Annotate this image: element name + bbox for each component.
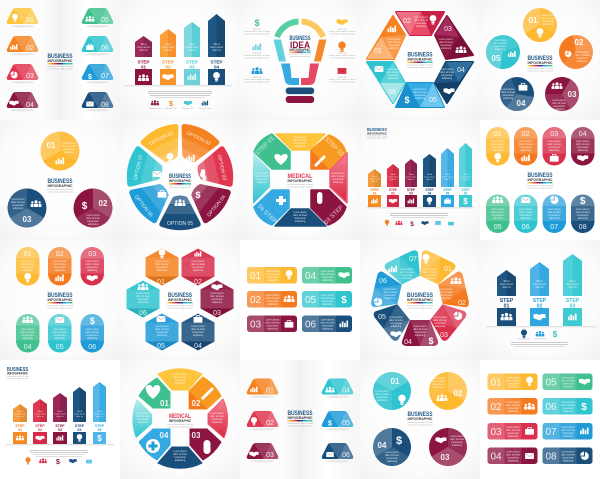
panel: five pies [479, 8, 598, 118]
numbers: 01 [444, 266, 452, 273]
title [6, 367, 29, 380]
option labels: OPTION 03 [216, 154, 227, 181]
title: BUSINESS [48, 179, 72, 185]
panel: eight trapezoids: 02 [26, 45, 34, 52]
panel: three pies [0, 132, 120, 235]
panel: eight horizontal bars: 03 [490, 427, 502, 438]
panel: six step arrows: STEP [389, 188, 398, 192]
text blocks [386, 16, 454, 100]
title: INFOGRAPHIC [408, 58, 433, 62]
panel: six step arrows: 01 [373, 192, 376, 196]
panel: eight trapezoids: 01 [26, 17, 34, 24]
panel: four pies [366, 365, 474, 473]
title: INFOGRAPHIC [528, 61, 553, 65]
panel: six step arrows: 03 [409, 192, 413, 196]
panel: six horizontal bars: 05 [305, 295, 316, 306]
panel: six pills: 02 [56, 251, 64, 258]
panel: four step arrows: STEP [138, 60, 150, 64]
numbers: 06 [379, 278, 387, 285]
panel: six pills: 04 [24, 344, 32, 351]
panel: three step arrows: 01 [504, 304, 509, 310]
panel: four step arrows: 01 [141, 64, 146, 70]
panel: eight horizontal bars: 08 [545, 452, 557, 462]
panel: six hexagons: 06 [139, 310, 147, 317]
option labels: OPTION 04 [206, 194, 227, 218]
option labels: OPTION 05 [167, 221, 193, 227]
step labels [255, 135, 345, 226]
title: BUSINESS [367, 127, 388, 133]
panel: eight trapezoids: $ [88, 74, 92, 81]
panel: six pills [16, 247, 104, 352]
panel: five pies: 01 [529, 16, 538, 25]
panel: five pies: 04 [517, 99, 526, 108]
title: INFOGRAPHIC [48, 184, 73, 188]
title [47, 54, 74, 70]
title: BUSINESS [528, 173, 552, 179]
panel: four step arrows: STEP [162, 60, 174, 64]
right steps: STEP 04 [338, 29, 347, 31]
pill icon [204, 440, 210, 454]
step labels: 04 STEP [256, 204, 277, 225]
numbers: 02 [403, 18, 411, 25]
title [287, 174, 314, 188]
panel: eight horizontal bars: 05 [545, 378, 557, 388]
panel: five step arrows: $ [97, 434, 102, 443]
panel: three step arrows [486, 254, 596, 347]
panel: four step arrows: STEP [210, 60, 222, 64]
panel: five step arrows [6, 367, 114, 466]
numbers: 06 [388, 89, 396, 96]
title [169, 174, 192, 189]
title: INFOGRAPHIC [7, 372, 29, 376]
panel: six pills: $ [90, 316, 95, 326]
text blocks [136, 373, 224, 462]
pen icon [201, 387, 214, 400]
legend icons: $ [169, 101, 173, 108]
panel: six trapezoids: 01 [266, 388, 274, 394]
panel: eight trapezoids: 03 [26, 73, 34, 80]
title [167, 414, 194, 428]
right steps: STEP 06 [338, 77, 347, 79]
option labels: OPTION 06 [133, 194, 154, 219]
text blocks [383, 268, 453, 337]
panel: six step arrows: 05 [446, 192, 449, 196]
numbers: 04 [404, 339, 412, 346]
panel: four step arrows: STEP [186, 60, 198, 64]
right steps: STEP 05 [338, 53, 347, 55]
option labels: OPTION 07 [133, 154, 144, 181]
panel: eight trapezoids: 04 [26, 102, 34, 109]
left steps [244, 18, 271, 84]
panel: six pills: 01 [24, 251, 32, 258]
left steps: $ [254, 18, 260, 28]
panel: six pills: 05 [56, 344, 64, 351]
panel: six hexagons: 02 [194, 279, 202, 286]
panel: four pies: 04 [378, 441, 387, 450]
title: INFOGRAPHIC [367, 131, 388, 135]
panel: three step arrows: STEP [533, 298, 547, 304]
numbers: 01 [374, 48, 382, 55]
panel: six horizontal bars: 02 [250, 295, 261, 306]
pen icon [314, 155, 326, 167]
title: BUSINESS [408, 52, 432, 58]
title: INFOGRAPHIC [169, 179, 191, 183]
panel: business idea bulb [244, 18, 356, 103]
legend text [390, 213, 448, 218]
panel: eight horizontal bars: 01 [490, 378, 502, 388]
title: BUSINESS [169, 174, 191, 180]
arrow body text [14, 410, 105, 418]
step labels: 03 STEP [324, 205, 345, 226]
legend icons: Sample Text [165, 107, 177, 110]
title: BUSINESS [408, 412, 432, 418]
panel: eight horizontal bars [488, 374, 592, 464]
title [289, 36, 312, 58]
panel: four pies: $ [396, 435, 402, 447]
legend icons: Sample Text [199, 107, 211, 110]
step labels: STEP 02 [323, 137, 345, 158]
left steps: STEP 02 [253, 53, 262, 55]
panel: eight trapezoids: 05 [101, 17, 109, 24]
panel: three pies: $ [82, 201, 88, 212]
title: BUSINESS [48, 54, 72, 60]
panel: four step arrows: 03 [189, 64, 195, 70]
plus icon [146, 439, 160, 453]
panel: six step arrows: $ [463, 197, 468, 206]
panel: five step arrows: 03 [58, 428, 62, 432]
title [47, 179, 74, 194]
panel: six horizontal bars: 06 [305, 320, 316, 330]
panel: three pies: 01 [47, 141, 56, 150]
panel: four step arrows: 02 [165, 64, 171, 70]
panel: six step arrows: 04 [428, 192, 431, 196]
panel: four pies: 02 [454, 389, 463, 398]
legend icons: Sample Text [182, 107, 194, 110]
panel: eight pills: 08 [579, 224, 587, 231]
panel: five step arrows: STEP [75, 424, 85, 428]
panel: five step arrows: STEP [35, 424, 45, 428]
title: INFOGRAPHIC [169, 419, 191, 423]
icons: $ [428, 336, 434, 346]
panel: six horizontal bars: $ [341, 295, 347, 306]
title [167, 293, 194, 310]
title [407, 293, 434, 310]
panel: five step arrows: 01 [18, 428, 22, 432]
panel: six hexagons: 01 [157, 279, 165, 286]
panel: three step arrows: 03 [570, 304, 575, 310]
panel: six step arrows [366, 127, 474, 228]
title: MEDICAL [288, 174, 313, 180]
heart icon [274, 154, 288, 165]
title: INFOGRAPHIC [408, 417, 433, 421]
panel: six horizontal bars [247, 267, 352, 332]
panel: six trapezoids: $ [328, 420, 332, 428]
legend icons: Sample Text [534, 338, 546, 340]
title [407, 52, 434, 69]
numbers: 03 [440, 332, 448, 339]
panel: five step arrows: 05 [98, 428, 101, 432]
panel: eight horizontal bars: $ [581, 402, 587, 413]
panel: six step arrows: 06 [464, 192, 467, 196]
panel: eight pills: 02 [522, 131, 530, 138]
left steps: STEP 01 [253, 29, 262, 31]
option labels [133, 130, 227, 227]
panel: six trapezoids: 02 [266, 420, 274, 427]
panel: eight pills: 06 [522, 224, 530, 231]
title: BUSINESS [528, 56, 552, 62]
numbers: 05 [429, 97, 437, 104]
legend icons: $ [410, 222, 414, 228]
panel: six trapezoids: 03 [266, 452, 274, 459]
panel: eight pills: 04 [579, 131, 587, 138]
panel: three step arrows: STEP [500, 298, 514, 304]
title [287, 411, 314, 428]
title [47, 293, 74, 310]
panel: five pies: 02 [575, 38, 584, 47]
panel: six trapezoids: 04 [342, 388, 350, 394]
panel: six horizontal bars: 03 [250, 320, 261, 330]
panel: six step arrows: STEP [370, 188, 380, 192]
panel: eight pills [486, 127, 594, 233]
panel: six hexagons: 04 [194, 343, 202, 350]
pill icon [317, 192, 322, 204]
title: INFOGRAPHIC [407, 298, 433, 302]
panel: five step arrows: 04 [78, 428, 81, 432]
legend icons [518, 330, 558, 340]
panel: six horizontal bars: 01 [250, 271, 261, 282]
icons: $ [404, 95, 410, 105]
panel: eight horizontal bars: 07 [545, 427, 557, 438]
option labels: OPTION 01 [148, 130, 175, 147]
numbers: 04 [160, 431, 169, 440]
option labels: OPTION 02 [185, 130, 212, 147]
panel: five pies: 05 [492, 54, 501, 63]
panel: eight horizontal bars: 04 [490, 452, 502, 462]
legend icons: Sample Text [518, 338, 530, 340]
title: INFOGRAPHIC [528, 178, 553, 182]
title: INFOGRAPHIC [288, 416, 313, 420]
numbers [160, 399, 201, 440]
panel: six trapezoids: 05 [342, 420, 350, 427]
left steps: STEP 03 [253, 77, 262, 79]
panel: eight pills: $ [580, 196, 586, 207]
title [407, 412, 434, 426]
panel: eight pills: 05 [494, 224, 502, 231]
panel: eight horizontal bars: 02 [490, 402, 502, 413]
panel: six trapezoids [247, 378, 353, 462]
panel: four pies: 03 [441, 453, 450, 462]
step labels: STEP 01 [255, 135, 276, 157]
numbers [374, 18, 465, 104]
legend text [511, 342, 568, 347]
numbers: 02 [458, 300, 466, 307]
title: INFOGRAPHIC [290, 48, 311, 52]
panel: six horizontal bars: 04 [305, 271, 316, 282]
panel: five step arrows: 02 [38, 428, 42, 432]
numbers: 03 [192, 431, 201, 440]
legend icons: $ [56, 459, 60, 466]
panel: three pies: 03 [23, 215, 32, 224]
panel: five pies: 03 [568, 90, 577, 99]
numbers: 02 [192, 399, 201, 408]
panel: four step arrows [124, 14, 232, 110]
panel: eight trapezoids [7, 8, 113, 112]
panel: five step arrows: STEP [95, 424, 105, 428]
panel: five step arrows: STEP [15, 424, 25, 428]
numbers: 07 [409, 256, 417, 263]
panel: six hexagons [126, 248, 234, 350]
title [527, 173, 554, 190]
panel: three pies: 02 [99, 199, 108, 208]
panel: six pills: 03 [88, 251, 96, 258]
panel: hexagon of six triangles [367, 12, 473, 107]
title: INFOGRAPHIC [288, 179, 313, 183]
numbers: 04 [457, 67, 465, 74]
bulb [274, 22, 326, 103]
panel: eight pills: 07 [550, 224, 558, 231]
title: BUSINESS [407, 293, 433, 299]
panel: three step arrows: STEP [566, 298, 580, 304]
panel: six pills: 06 [88, 344, 96, 351]
heart icon [146, 385, 160, 399]
plus icon [276, 196, 286, 205]
panel: six step arrows: STEP [425, 188, 435, 192]
panel: seven-segment heptagon [370, 249, 470, 346]
right steps [329, 19, 356, 84]
legend text [30, 450, 88, 457]
panel: six step arrows: STEP [443, 188, 453, 192]
panel: four step arrows: 04 [214, 64, 219, 70]
panel: seven option wheel [124, 120, 236, 230]
legend text [148, 91, 212, 98]
numbers: 01 [160, 399, 169, 408]
panel: six hexagons: 03 [213, 310, 221, 317]
panel: medical wheel [132, 369, 228, 468]
panel: eight trapezoids: 06 [101, 45, 109, 52]
title: BUSINESS [288, 411, 312, 417]
legend icons: $ [553, 330, 558, 339]
title: INFOGRAPHIC [168, 298, 192, 302]
title: BUSINESS [290, 36, 310, 42]
panel: six hexagons: 05 [157, 343, 165, 350]
legend icons [149, 100, 211, 110]
text blocks [255, 136, 345, 223]
panel: six trapezoids: 06 [342, 452, 350, 459]
numbers [378, 256, 466, 346]
numbers: 03 [444, 26, 452, 33]
title: INFOGRAPHIC [48, 59, 73, 63]
panel: six step arrows: STEP [407, 188, 416, 192]
title: BUSINESS [168, 293, 192, 299]
panel: four pies: 01 [391, 377, 400, 386]
panel: three step arrows: 02 [537, 304, 542, 310]
title: IDEA [290, 40, 310, 51]
panel: eight trapezoids: 07 [101, 73, 109, 80]
numbers: 05 [378, 314, 386, 321]
title [366, 127, 388, 140]
legend icons: Sample Text [149, 107, 161, 110]
panel: eight pills: 01 [494, 131, 502, 138]
title: BUSINESS [7, 367, 29, 373]
panel: eight pills: 03 [550, 131, 558, 138]
panel: eight horizontal bars: 06 [545, 402, 557, 413]
panel: six step arrows: STEP [461, 188, 471, 192]
panel: eight trapezoids: 08 [101, 102, 109, 109]
panel: medical rounded square [253, 134, 347, 226]
title: INFOGRAPHIC [48, 298, 73, 302]
panel: six step arrows: 02 [391, 192, 395, 196]
arrow body text [369, 173, 471, 183]
panel: five step arrows: STEP [55, 424, 65, 428]
title: MEDICAL [169, 414, 191, 420]
title: BUSINESS [48, 293, 72, 299]
icons: $ [195, 190, 201, 200]
title [527, 56, 554, 72]
